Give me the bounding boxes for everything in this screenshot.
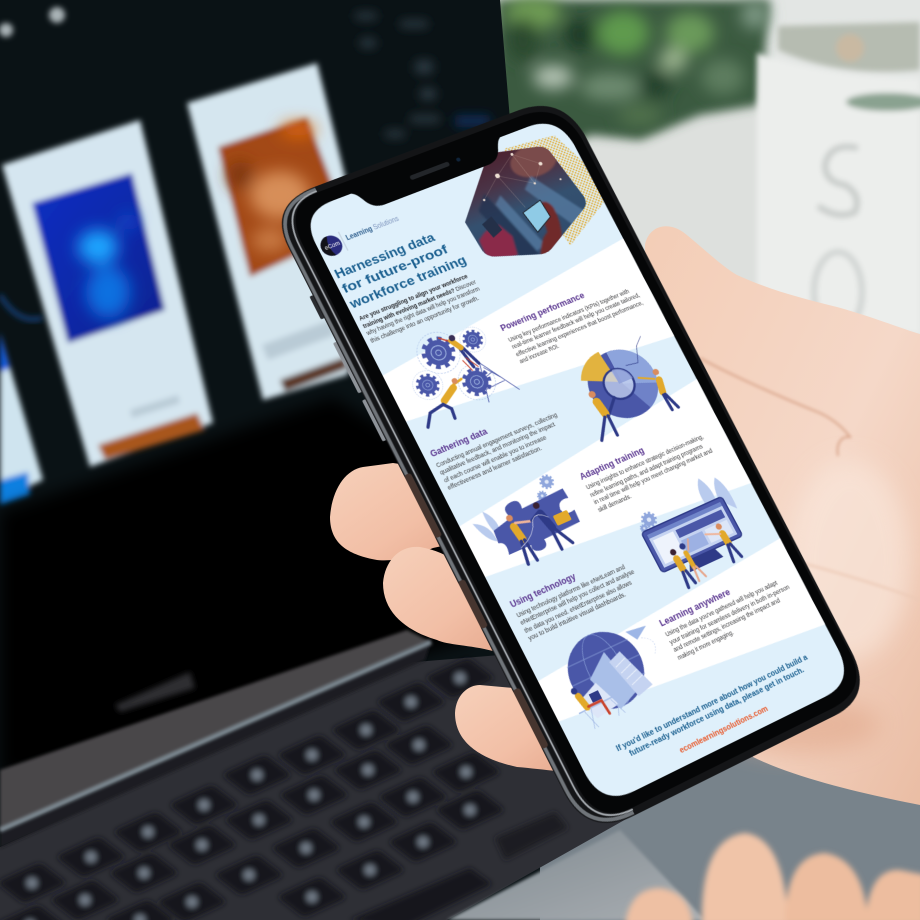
text: using technology: Using technology [489, 556, 562, 587]
desk surface [540, 700, 920, 920]
text: learning anywhere [657, 563, 799, 662]
text: learning anywhere: your training for seamless delivery in both in-person [650, 580, 784, 628]
illustration: monitor and team [640, 478, 744, 590]
text: gathering data: effectiveness and learner satisfaction. [435, 441, 537, 479]
plant [497, 0, 770, 150]
illustration: gears and ladder [412, 326, 520, 430]
logo: Learning Solutions [345, 216, 404, 242]
call to action [615, 654, 823, 780]
blurred fingers bottom right [625, 833, 920, 920]
laptop hinge [0, 630, 431, 832]
text: using technology: eNetEnterprise will help you collect and analyse [500, 558, 623, 603]
tablet [520, 200, 555, 234]
screen card: left partial [0, 333, 43, 505]
text: adapting training: skill demands. [588, 489, 627, 506]
call to action: If you'd like to understand more about how you could build a [586, 643, 795, 717]
phone notch [346, 135, 514, 215]
hand: finger three [455, 685, 575, 772]
screen card: orange [187, 63, 378, 400]
illustration: globe and city [548, 612, 679, 732]
blurred top canvas icons [0, 7, 65, 37]
white ledge behind plant [590, 100, 760, 320]
laptop palm rest [447, 830, 705, 920]
text: learning anywhere: making it more engaging. [657, 617, 720, 642]
text: using technology: Using technology platforms like eNetLearn and [496, 553, 613, 596]
phone body and bezel [281, 106, 860, 823]
side button: volume down [362, 399, 387, 442]
call to action: ecomlearningsolutions.com [649, 684, 748, 723]
text: gathering data [428, 399, 570, 492]
text: using technology [508, 548, 644, 643]
hand: finger two [383, 547, 510, 651]
text: learning anywhere: Using the data you've gathered will help you adapt [647, 576, 772, 621]
screen card: jellyfish [2, 120, 213, 467]
text: learning anywhere: and remote settings, increasing the impact and [654, 592, 773, 635]
text: powering performance: and increase ROI. [519, 346, 564, 365]
halftone pattern behind photo [496, 128, 604, 246]
intro text: why having the right data will help you transform [361, 289, 484, 334]
text: powering performance: Powering performance [500, 295, 595, 334]
text: powering performance: effective learning experiences that boost performance, [515, 307, 658, 358]
orange image glow [228, 123, 316, 252]
text: using technology: the data you need. eNetEnterprise also allows [503, 567, 619, 610]
logo [317, 210, 404, 259]
title: workforce training [343, 255, 473, 309]
text: adapting training: refine learning paths, and adapt training programs [581, 446, 707, 492]
white plant pot [757, 22, 920, 335]
white diagonal bands [365, 235, 837, 748]
text: gathering data: Conducting annual engagement surveys, collecting [425, 411, 555, 458]
text: adapting training [580, 436, 713, 512]
side button: volume up [333, 342, 362, 393]
text: learning anywhere: Learning anywhere [641, 578, 721, 612]
illustration: pie chart and magnifier [563, 335, 679, 442]
logo: eCom [323, 241, 341, 251]
text: adapting training: in real time will help you meet changing market and [585, 451, 717, 499]
title [334, 234, 468, 308]
illustration: puzzle and handshake [472, 474, 580, 566]
right side wall [495, 0, 920, 780]
text: gathering data: of each course will enable you to increase [432, 431, 542, 472]
title: Harnessing data [330, 232, 442, 280]
blurred laptop logo [115, 672, 195, 712]
text: powering performance: real-time learner feedback will help you create tailored, [512, 299, 656, 351]
intro text: Are you struggling to align your workforce [355, 276, 472, 319]
phone screen [300, 113, 867, 807]
icon: paper plane [625, 623, 650, 643]
hand: finger one [330, 463, 470, 560]
text: using technology: you to build intuitive visual dashboards. [507, 578, 612, 617]
phone with perspective [281, 106, 860, 823]
text: powering performance: Using key performance indicators (KPIs) together with [508, 295, 644, 344]
hexagon photo [464, 128, 586, 257]
text: adapting training: Using insights to enhance strategic decision-making, [578, 437, 709, 485]
blurred connector line [0, 295, 42, 319]
laptop screen [0, 0, 510, 780]
laptop lower bezel [0, 397, 470, 780]
text: gathering data: Gathering data [419, 420, 482, 448]
laptop side panel with blurred controls [355, 12, 490, 138]
intro text: this challenge into an opportunity for growth. [365, 297, 483, 340]
text: adapting training: Adapting training [571, 444, 644, 476]
call to action: future-ready workforce using data, please get in touch. [599, 654, 790, 723]
side button: mute [309, 295, 325, 319]
text: gathering data: qualitative feedback, and monitoring the impact [428, 419, 553, 465]
hand: palm and thumb [640, 226, 920, 805]
title: for future-proof [337, 244, 455, 294]
text: powering performance [500, 289, 644, 364]
laptop keyboard [0, 642, 660, 920]
jellyfish glow [78, 214, 136, 318]
intro text: training with evolving market needs? Discover [358, 282, 481, 326]
